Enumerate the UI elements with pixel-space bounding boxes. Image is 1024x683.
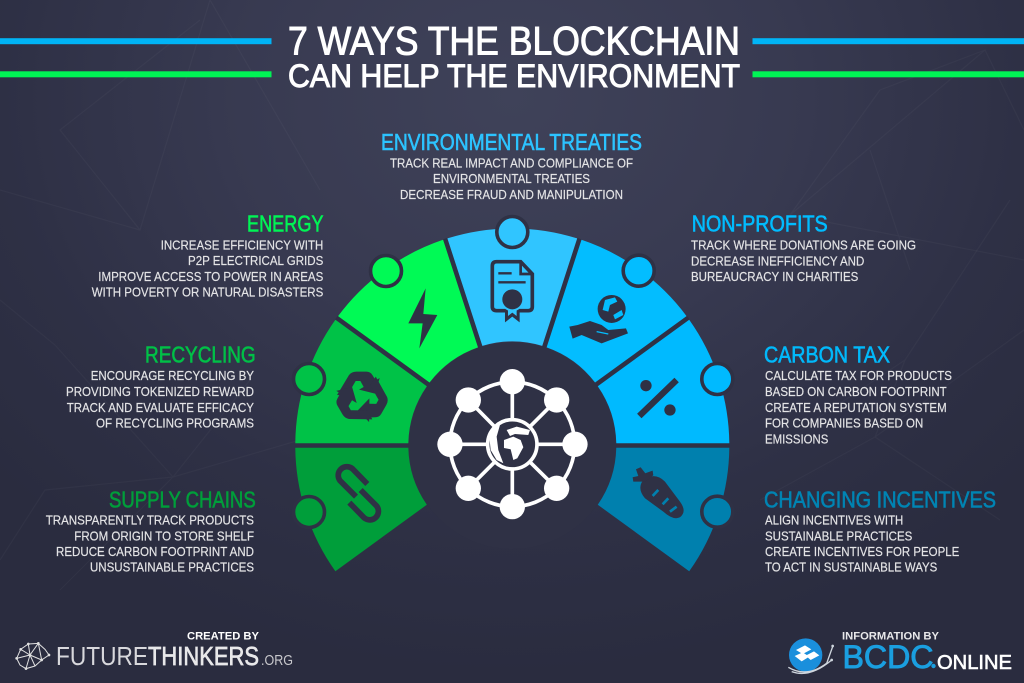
logo: futurethinkers: .ORG (261, 653, 293, 669)
text: recycling: ENCOURAGE RECYCLING BY (91, 368, 254, 383)
text: environmental treaties: ENVIRONMENTAL TREATIES (433, 171, 590, 186)
text: environmental treaties: DECREASE FRAUD AND MANIPULATION (400, 187, 623, 202)
footer: created by: CREATED BY (187, 630, 260, 642)
text: non-profits: TRACK WHERE DONATIONS ARE GOING (691, 237, 916, 252)
icon: lightning bolt (408, 288, 437, 348)
logo: bcdc.online: BCDC (842, 639, 934, 675)
text: environmental treaties: TRACK REAL IMPACT AND COMPLIANCE OF (390, 155, 633, 170)
title: CAN HELP THE ENVIRONMENT (288, 58, 740, 94)
text: changing incentives: TO ACT IN SUSTAINABLE WAYS (765, 560, 937, 575)
text: non-profits: NON-PROFITS (692, 211, 828, 237)
title bars (0, 38, 1024, 77)
text: non-profits: DECREASE INEFFICIENCY AND (691, 253, 864, 268)
text: energy: WITH POVERTY OR NATURAL DISASTERS (92, 285, 323, 300)
icon: bcdc globe (788, 638, 834, 673)
text: carbon tax: BASED ON CARBON FOOTPRINT (765, 384, 947, 399)
text: energy: INCREASE EFFICIENCY WITH (161, 237, 323, 252)
logo: futurethinkers: THINKERS (148, 641, 259, 671)
icon: percent (639, 380, 677, 416)
text: environmental treaties (381, 129, 642, 202)
icon: hand holding globe (569, 295, 628, 343)
text: carbon tax: CARBON TAX (764, 342, 890, 368)
text: supply chains: REDUCE CARBON FOOTPRINT AND (56, 544, 254, 559)
logo: bcdc.online: ONLINE (937, 652, 1012, 674)
icon: recycle (331, 372, 396, 431)
footer: information by: INFORMATION BY (842, 630, 940, 642)
text: supply chains: TRANSPARENTLY TRACK PRODUCTS (46, 512, 254, 527)
text: energy: P2P ELECTRICAL GRIDS (188, 253, 323, 268)
icon: central network globe (437, 369, 588, 519)
text: energy (92, 211, 324, 300)
text: carbon tax: CREATE A REPUTATION SYSTEM (765, 400, 947, 415)
text: changing incentives: ALIGN INCENTIVES WITH (765, 512, 903, 527)
text: recycling: TRACK AND EVALUATE EFFICACY (67, 400, 254, 415)
text: supply chains (46, 486, 256, 575)
text: recycling: RECYCLING (145, 342, 256, 368)
text: recycling: PROVIDING TOKENIZED REWARD (66, 384, 254, 399)
text: recycling (66, 342, 256, 431)
text: carbon tax: CALCULATE TAX FOR PRODUCTS (765, 368, 952, 383)
text: changing incentives: SUSTAINABLE PRACTICES (765, 528, 912, 543)
text: supply chains: UNSUSTAINABLE PRACTICES (90, 560, 254, 575)
title (288, 20, 740, 94)
logo: futurethinkers: FUTURE (56, 641, 148, 671)
text: changing incentives (764, 486, 996, 575)
text: carbon tax: FOR COMPANIES BASED ON (765, 416, 923, 431)
text: carbon tax: EMISSIONS (765, 431, 828, 446)
text: carbon tax (764, 342, 952, 446)
semicircle wheel segments (286, 228, 739, 574)
text: energy: IMPROVE ACCESS TO POWER IN AREAS (98, 269, 323, 284)
center disc (409, 342, 616, 549)
text: changing incentives: CREATE INCENTIVES FOR PEOPLE (765, 544, 959, 559)
text: supply chains: FROM ORIGIN TO STORE SHELF (74, 528, 254, 543)
text: energy: ENERGY (247, 211, 324, 237)
icon: brain network (15, 642, 50, 670)
title: 7 WAYS THE BLOCKCHAIN (288, 20, 740, 64)
icon: chain link (338, 467, 378, 520)
icon: carrot (633, 467, 684, 518)
icon: certificate document (492, 262, 532, 322)
text: non-profits: BUREAUCRACY IN CHARITIES (691, 269, 858, 284)
text: supply chains: SUPPLY CHAINS (109, 486, 256, 512)
text: environmental treaties: ENVIRONMENTAL TREATIES (381, 129, 642, 155)
logo: bcdc.online (842, 639, 1012, 675)
text: recycling: OF RECYCLING PROGRAMS (96, 416, 254, 431)
text: non-profits (691, 211, 916, 284)
segment circles (294, 216, 733, 528)
logo: futurethinkers (56, 641, 293, 671)
